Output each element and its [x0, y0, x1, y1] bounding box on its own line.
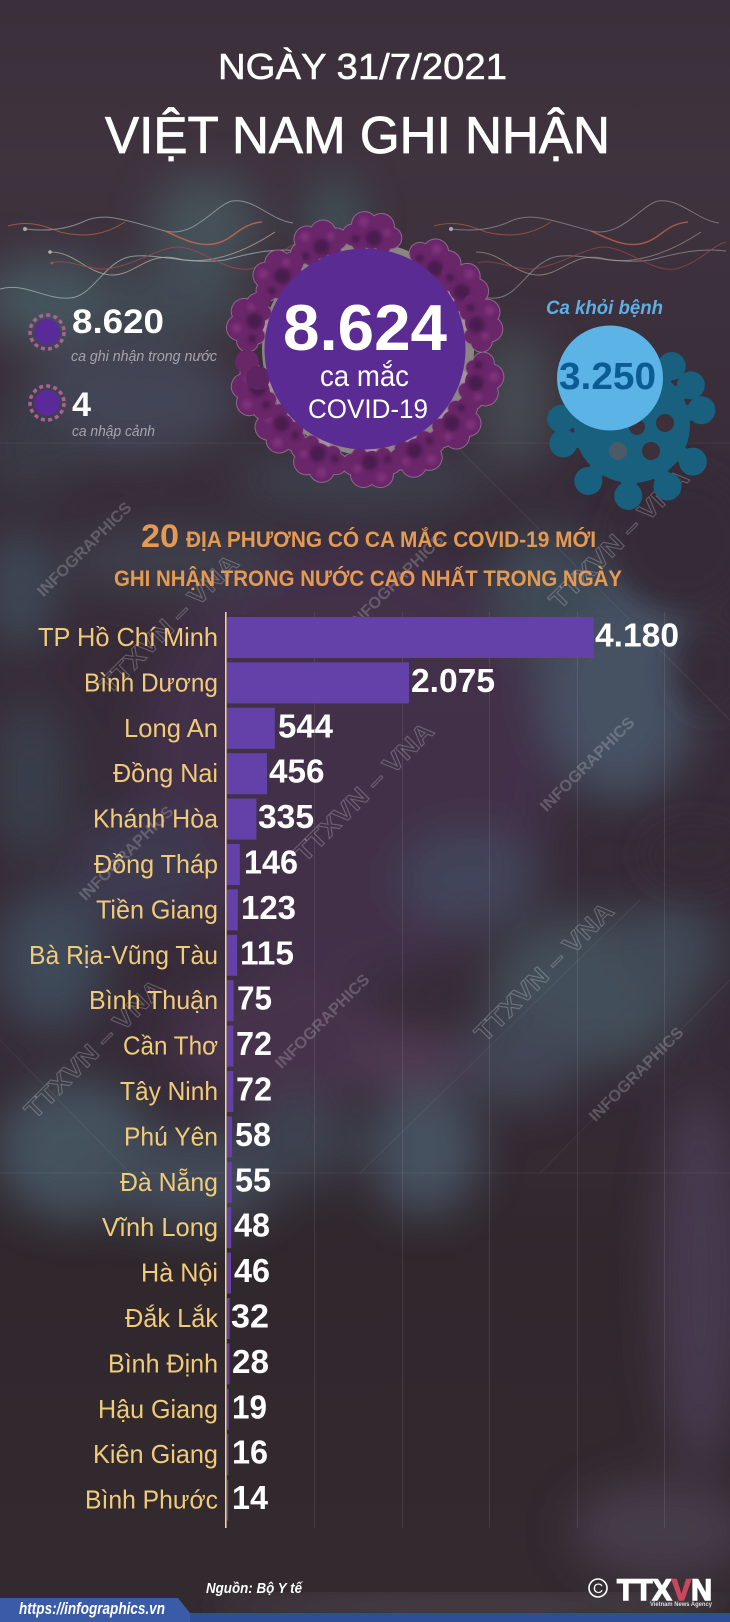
icon: main virus with total cases [221, 210, 510, 491]
value labels: 456 [269, 753, 324, 790]
decorative waves left [0, 201, 300, 298]
heading line 2: GHI NHẬN TRONG NƯỚC CAO NHẤT TRONG NGÀY [114, 566, 622, 591]
category labels: Bình Dương [84, 667, 218, 697]
axis [225, 612, 227, 1528]
virus spikes [221, 210, 510, 491]
value labels: 544 [278, 707, 334, 744]
category labels: Bình Định [108, 1348, 218, 1378]
bar chart [29, 612, 679, 1528]
label: ca mắc: ca mắc [320, 360, 409, 393]
text: TTXVN – VNA [19, 974, 170, 1125]
caption: ca ghi nhận trong nước [71, 348, 217, 365]
category labels [29, 622, 219, 1515]
text: TTXVN – VNA [94, 549, 245, 700]
title [105, 46, 610, 165]
logo: TTXVN [589, 1574, 713, 1608]
icon: small virus [30, 315, 64, 349]
value labels: 335 [258, 798, 314, 835]
value labels: 58 [235, 1116, 271, 1153]
value labels: 2.075 [411, 662, 495, 699]
heading line 1: ĐỊA PHƯƠNG CÓ CA MẮC COVID-19 MỚI [186, 527, 596, 552]
value labels: 48 [234, 1207, 270, 1244]
category labels: Đồng Nai [113, 758, 218, 788]
category labels: Vĩnh Long [102, 1212, 218, 1242]
category labels: Khánh Hòa [93, 804, 219, 834]
title line: date: NGÀY 31/7/2021 [218, 46, 507, 87]
decorative waves right [426, 201, 726, 298]
value labels: 19 [232, 1388, 267, 1425]
category labels: Đồng Tháp [94, 849, 218, 879]
grid lines [314, 612, 664, 1528]
number: 8.620 [72, 303, 164, 341]
category labels: Tây Ninh [120, 1076, 218, 1106]
label: COVID-19: COVID-19 [308, 394, 428, 424]
value labels: 72 [236, 1025, 272, 1062]
value labels: 14 [232, 1479, 269, 1516]
value labels: 72 [236, 1070, 272, 1108]
category labels: Phú Yên [124, 1121, 218, 1151]
footer band [0, 1598, 730, 1622]
stat: domestic cases [30, 303, 217, 365]
category labels: Hậu Giang [98, 1394, 218, 1424]
category labels: Kiên Giang [93, 1439, 218, 1469]
category labels: Long An [124, 713, 218, 743]
category labels: Bình Thuận [89, 985, 218, 1015]
category labels: Đắk Lắk [125, 1303, 219, 1333]
icon: blue virus [546, 340, 718, 511]
heading line 1: 20 [141, 518, 179, 554]
icon: small virus [30, 386, 64, 420]
wordmark: TTXVN [617, 1574, 712, 1607]
text: TTXVN – VNA [544, 464, 695, 615]
caption: ca nhập cảnh [72, 423, 155, 440]
value labels: 123 [241, 889, 296, 926]
stat: recovered [546, 298, 718, 511]
source note: Nguồn: Bộ Y tế [206, 1580, 303, 1597]
stat: imported cases [30, 386, 155, 440]
virus purple disc [264, 248, 466, 450]
category labels: Hà Nội [141, 1258, 218, 1288]
title line: headline: VIỆT NAM GHI NHẬN [105, 107, 610, 165]
watermarks: INFOGRAPHICS [34, 499, 136, 600]
chart heading [114, 518, 622, 591]
watermarks: INFOGRAPHICS [76, 803, 178, 904]
value labels: 75 [237, 980, 272, 1017]
watermarks: INFOGRAPHICS [586, 1024, 688, 1125]
value labels: 4.180 [595, 616, 679, 654]
copyright mark: C [593, 1580, 603, 1596]
value labels: 28 [232, 1343, 269, 1380]
ground smoke [210, 1599, 730, 1613]
watermarks: INFOGRAPHICS [537, 714, 639, 815]
disc [557, 326, 663, 430]
value labels: 115 [240, 934, 294, 971]
faint guide lines [0, 430, 730, 1173]
category labels: Đà Nẵng [120, 1167, 218, 1197]
number: 3.250 [559, 356, 656, 398]
value labels: 46 [234, 1252, 270, 1289]
category labels: Bà Rịa-Vũng Tàu [29, 940, 218, 970]
value labels: 32 [231, 1298, 269, 1334]
total number: 8.624 [283, 291, 447, 364]
bars [227, 617, 594, 1521]
website url: https://infographics.vn [19, 1599, 165, 1618]
agency name: Vietnam News Agency [650, 1602, 713, 1608]
label: Ca khỏi bệnh [546, 298, 663, 319]
category labels: TP Hồ Chí Minh [38, 622, 218, 652]
watermarks [34, 499, 688, 1125]
category labels: Cần Thơ [123, 1031, 218, 1061]
text: TTXVN – VNA [469, 897, 620, 1048]
value labels: 146 [244, 844, 298, 880]
value labels: 55 [235, 1161, 271, 1198]
value labels [231, 616, 679, 1516]
text: TTXVN – VNA [289, 717, 440, 868]
category labels: Tiền Giang [96, 894, 218, 924]
number: 4 [72, 386, 91, 424]
watermarks: INFOGRAPHICS [346, 531, 448, 632]
value labels: 16 [232, 1434, 268, 1471]
watermarks: INFOGRAPHICS [272, 971, 374, 1072]
category labels: Bình Phước [85, 1485, 218, 1515]
